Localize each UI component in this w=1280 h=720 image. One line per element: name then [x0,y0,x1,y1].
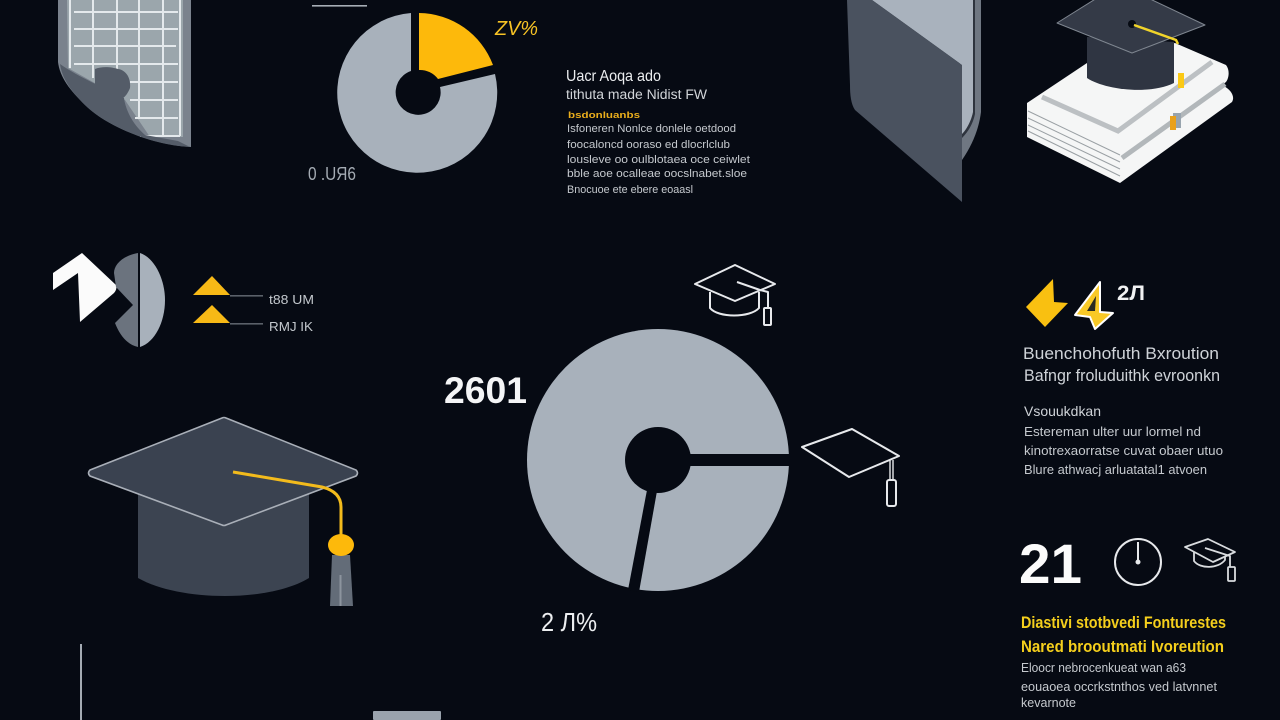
text block: right bottom [1021,614,1226,710]
icon: outline cap top [695,265,775,325]
tassel cord [233,472,341,535]
cap board [88,418,358,526]
text block: top centre: Isfoneren Nonlce donlele oetdood [567,123,736,135]
text block: right middle: Vsouukdkan [1024,403,1101,419]
text block: right bottom: Diastivi stotbvedi Fonturestes [1021,614,1226,632]
legend: two triangles [193,276,314,334]
bottom block [373,711,441,720]
text block: right bottom: Nared brooutmati Ivoreution [1021,638,1224,656]
cap board [1057,0,1205,53]
text block: top centre: bsdonluanbs [568,110,640,120]
icon: outline cap lower right [1185,539,1235,581]
icon: outline cap beside chart [802,429,899,506]
icon: white arrow and split lens [53,253,165,347]
text block: right bottom: eouaoea occrkstnthos ved latvnnet [1021,680,1218,694]
text block: right bottom: Eloocr nebrocenkueat wan a63 [1021,661,1186,675]
cap body [1087,37,1174,90]
text block: top centre: lousleve oo oulblotaea oce ceiwlet [567,154,750,166]
icon: yellow diamond and four [1026,279,1145,329]
text block: top centre [566,68,750,196]
text block: top centre: Bnocuoe ete ebere eoaasl [567,184,693,196]
books [1027,43,1233,183]
big number: 21 [1019,532,1082,595]
icon: cap on books [1027,0,1233,183]
legend: two triangles: RMJ IK [269,319,313,334]
text block: right middle [1023,345,1223,477]
icon: clock [1115,539,1161,585]
top rule [312,5,367,7]
text block: top centre: foocaloncd ooraso ed dlocrlclub [567,139,730,151]
donut grey segment [337,13,497,173]
label: yellow percent: ZV% [494,18,538,40]
icon: yellow diamond and four: 2Л [1117,282,1145,305]
label: central year: 2601 [444,370,527,411]
label: central percent: 2 Л% [541,607,597,637]
text block: right bottom: kevarnote [1021,696,1076,710]
text block: right middle: Bafngr froluduithk evroonkn [1024,367,1220,385]
text block: top centre: tithuta made Nidist FW [566,87,707,102]
icon: curled grid sheet [58,0,191,147]
legend: two triangles: t88 UM [269,292,314,307]
icon: folder shape [847,0,981,202]
cap body [138,490,309,596]
donut yellow segment [419,13,493,79]
text block: right middle: Buenchohofuth Bxroution [1023,345,1219,363]
text block: right middle: Blure athwacj arluatatal1 atvoen [1024,462,1207,477]
tassel [1134,25,1178,44]
text block: top centre: bble aoe ocalleae oocslnabet.sloe [567,168,747,180]
text block: top centre: Uacr Aoqa ado [566,68,661,85]
tassel [328,534,354,606]
chart: central pie [527,329,792,592]
chart: top donut [337,13,497,173]
text block: right middle: kinotrexaorratse cuvat obaer utuo [1024,443,1223,458]
text block: right middle: Estereman ulter uur lormel nd [1024,424,1201,439]
left vertical rule [80,644,82,720]
icon: large graduation cap [88,418,358,606]
label: grey percent: 0 .UЯ6 [308,164,356,184]
